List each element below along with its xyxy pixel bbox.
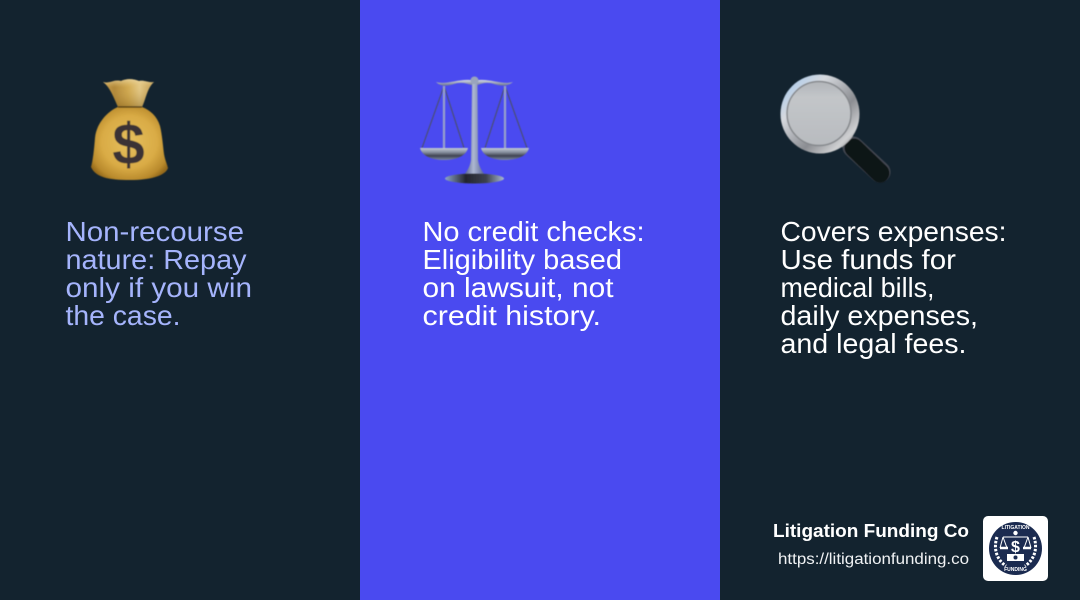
text: covers expenses: Use funds for: [780, 244, 956, 275]
text: covers expenses: [780, 216, 1006, 359]
icon: balance scales: [420, 76, 529, 184]
text: non-recourse: nature: Repay: [66, 244, 246, 275]
panel: no credit checks: [360, 0, 720, 600]
panel: covers expenses: [720, 0, 1080, 600]
text: non-recourse: the case.: [66, 300, 180, 331]
text: covers expenses: medical bills,: [780, 272, 934, 303]
logo: $: [1011, 539, 1020, 556]
icon: money bag: [91, 79, 168, 180]
icon: money bag: $: [112, 112, 145, 177]
text: no credit checks: No credit checks:: [422, 216, 644, 247]
logo: LITIGATION: [1002, 525, 1030, 531]
text: no credit checks: Eligibility based: [422, 244, 622, 275]
text: no credit checks: on lawsuit, not: [422, 272, 614, 303]
text: covers expenses: daily expenses,: [780, 300, 978, 331]
panel: non-recourse: [0, 0, 360, 600]
logo: FUNDING: [1004, 567, 1027, 573]
text: no credit checks: [422, 216, 644, 331]
brand name: Litigation Funding Co: [773, 521, 969, 541]
text: covers expenses: and legal fees.: [780, 328, 966, 359]
brand url: https://litigationfunding.co: [778, 551, 969, 568]
text: non-recourse: Non-recourse: [66, 216, 244, 247]
brand footer: [773, 516, 1048, 581]
text: no credit checks: credit history.: [422, 300, 601, 331]
logo: [983, 516, 1048, 581]
text: non-recourse: only if you win: [66, 272, 252, 303]
text: covers expenses: Covers expenses:: [780, 216, 1006, 247]
text: non-recourse: [66, 216, 252, 331]
icon: magnifying glass: [780, 74, 880, 173]
